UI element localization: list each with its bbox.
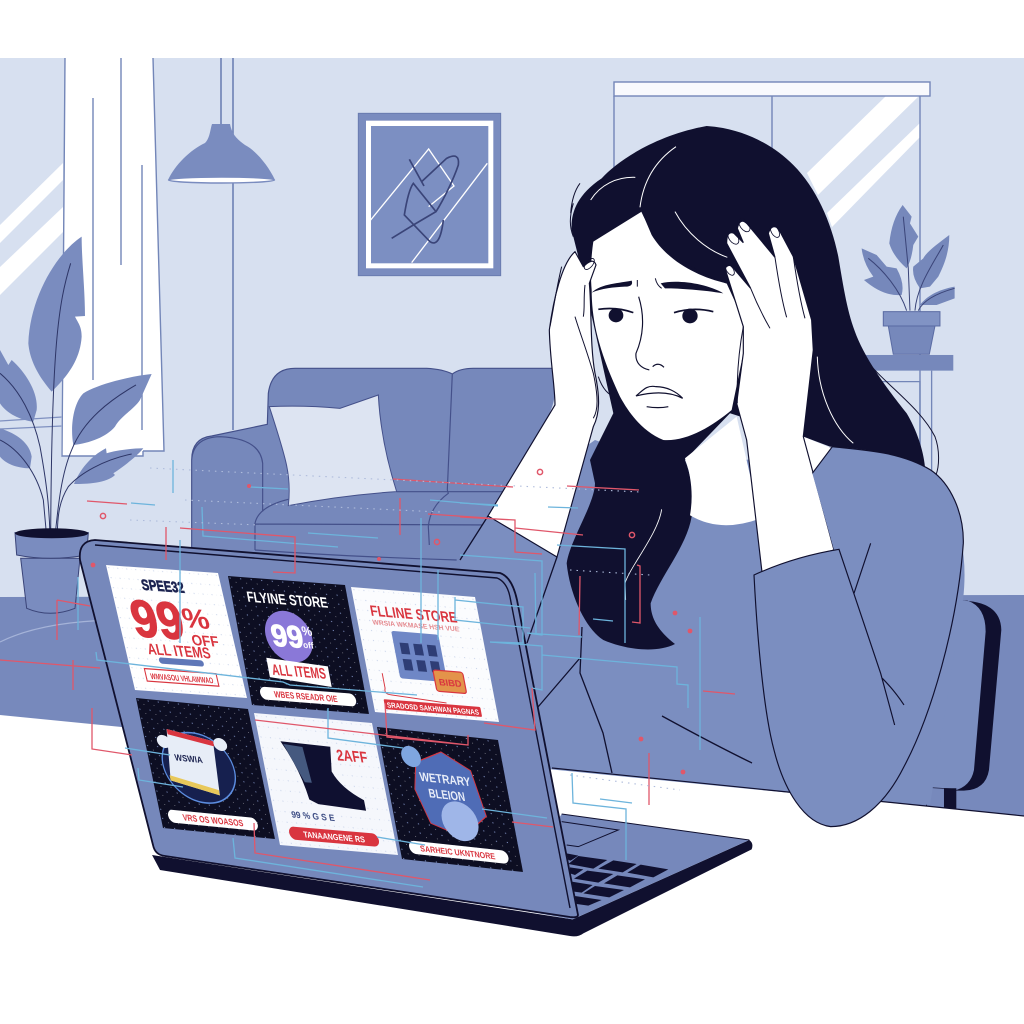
eyes [598, 308, 713, 323]
ad card 6: SARHEIC UKNTNORE [419, 843, 496, 861]
ad card 2: WBES RSEADR OIE [273, 689, 338, 704]
plant leaves [862, 205, 955, 305]
ad card 3 [351, 587, 499, 722]
framed wall art [358, 113, 501, 276]
laptop lid inner edge [95, 545, 570, 908]
ad card 3: FLLINE STORE [369, 603, 459, 627]
finger nails [582, 216, 781, 277]
left hand and forearm [488, 252, 599, 557]
right window [614, 82, 930, 470]
woman sweater body [460, 440, 965, 805]
window sill lines [0, 417, 62, 429]
holographic data lines: cyan [78, 460, 700, 887]
ad card 5: 99 % G S E [290, 809, 336, 823]
holographic dotted guide lines [130, 468, 680, 790]
ad card 5 [254, 713, 398, 855]
ad card 6: WETRARY [418, 769, 472, 789]
ad card 4 [136, 698, 275, 839]
leaves [0, 237, 152, 484]
ad card 1: OFF [190, 633, 221, 651]
touchpad [562, 822, 618, 847]
holographic data lines: red [0, 479, 735, 880]
right hand and forearm [725, 221, 834, 572]
sweater crease lines [460, 516, 752, 773]
ad card 5: 2AFF [335, 747, 369, 767]
ad card 1: WMVASOU VHLAWWAO [149, 672, 214, 685]
plant pot [888, 326, 935, 354]
ad card 2: off [302, 640, 315, 651]
ad card 4: WSWIA [174, 752, 204, 765]
laptop lid [80, 540, 578, 917]
right hand fingers [737, 257, 805, 403]
ad card 2: FLYINE STORE [245, 589, 329, 612]
hair [567, 126, 925, 649]
ad card 2: 99 [268, 619, 306, 655]
table edge [552, 768, 1024, 816]
laptop base [152, 814, 752, 936]
rug outline [0, 620, 112, 642]
ad card 1: 99 [125, 588, 190, 651]
ad card 1: % [179, 602, 213, 635]
shelf [863, 355, 953, 371]
ad card 6: BLEION [427, 786, 466, 804]
room background wall [0, 58, 1024, 598]
ad card 1 [106, 565, 247, 698]
left window light stripes [0, 163, 63, 295]
ad card 1: SPEE32 [140, 577, 186, 597]
cushion [269, 395, 397, 506]
ad card 2 [228, 576, 369, 714]
side shelf with potted plant [862, 205, 955, 473]
ad card 3: BIBD [438, 676, 463, 689]
ad card 6 [377, 727, 523, 872]
stray hair strands [570, 183, 939, 475]
face [591, 212, 743, 440]
holographic data dots [91, 469, 692, 774]
stems [0, 263, 136, 537]
woman head, hands and hair [488, 126, 939, 649]
pot [21, 558, 80, 613]
pendant lamp [168, 58, 275, 430]
floor [0, 595, 1024, 830]
collar skin [803, 437, 832, 474]
ad card 1: ALL ITEMS [146, 641, 212, 663]
ad card 3: SRADOSD SAKHWAN PAGNAS [386, 701, 480, 717]
neck [685, 417, 760, 525]
sofa [192, 368, 555, 593]
nose and mouth [636, 297, 683, 408]
ad card 5: TANAANGENE RS [303, 830, 366, 845]
hair highlights [591, 147, 853, 600]
curtain [61, 58, 164, 456]
keyboard [567, 853, 668, 906]
chair [921, 601, 1001, 810]
left hand fingers [550, 267, 620, 418]
ad card 2: ALL ITEMS [270, 661, 328, 683]
right sweater sleeve and upper arm [754, 447, 963, 827]
ad card 3: WRSIA WKMASE HSH VUE [372, 619, 460, 633]
table top [0, 715, 1024, 1024]
ad card 4: VRS OS WOASOS [182, 812, 244, 829]
left potted plant [0, 237, 152, 613]
ad card 2: % [300, 624, 313, 639]
eyebrows [592, 281, 723, 293]
